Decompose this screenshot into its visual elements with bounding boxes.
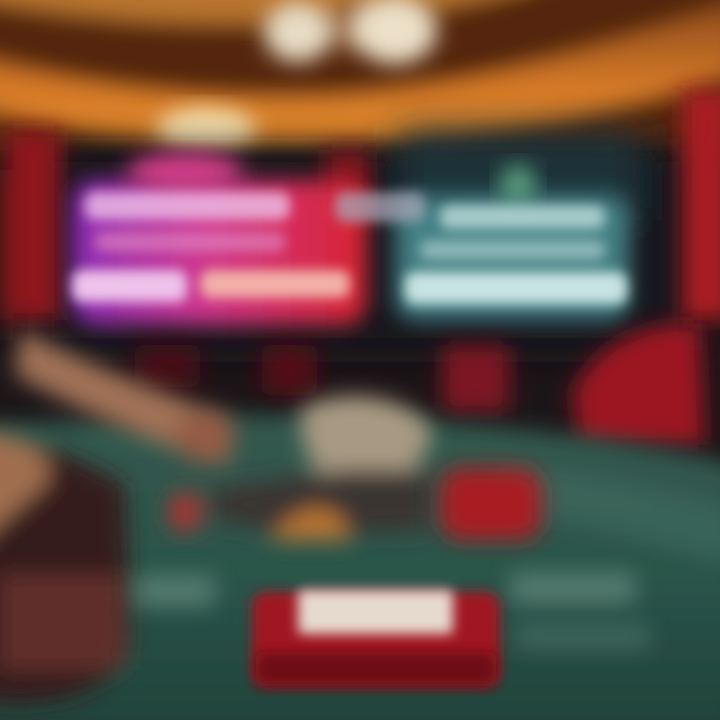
faint table labels — [135, 572, 650, 649]
hand at left — [0, 432, 130, 703]
curtains — [0, 90, 720, 340]
red object — [440, 468, 542, 540]
green table — [0, 415, 720, 720]
red chairs — [135, 324, 705, 445]
red box — [252, 590, 500, 687]
chandelier: small — [156, 108, 256, 152]
dark wall — [40, 130, 690, 350]
chandelier: top — [264, 0, 437, 64]
center chips and card stack — [168, 396, 432, 540]
ceiling — [0, 0, 720, 150]
sign: purple and pink — [72, 152, 367, 325]
sign: teal — [335, 165, 630, 320]
arm — [15, 330, 235, 465]
